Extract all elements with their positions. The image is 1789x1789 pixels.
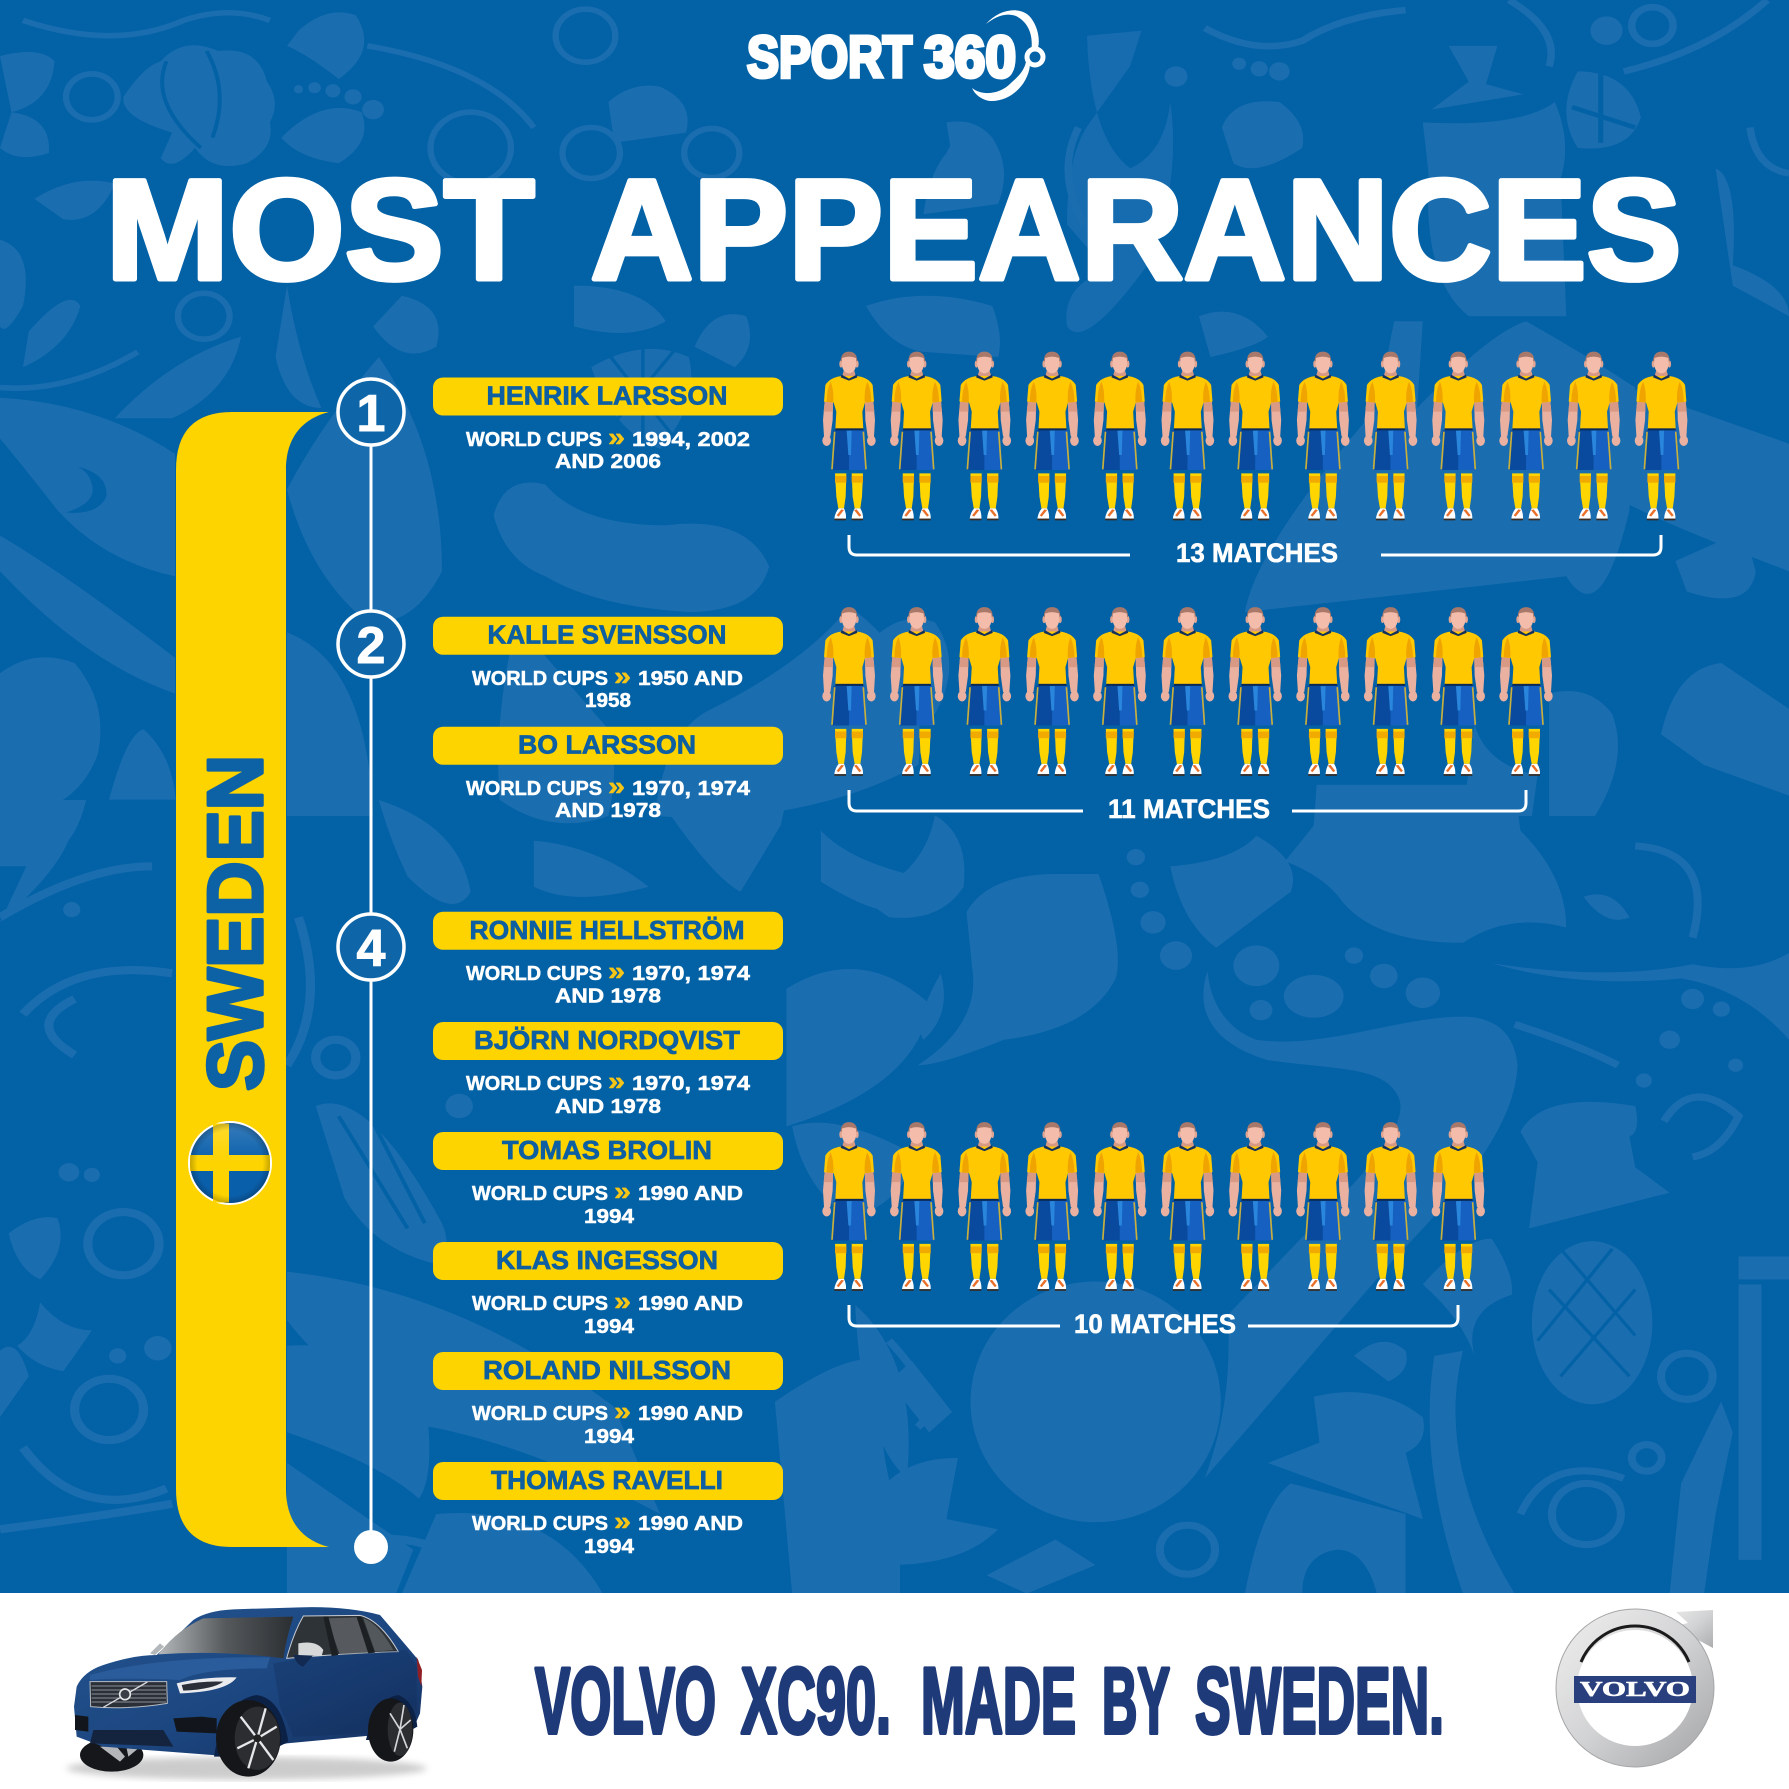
bracket: 11 matches	[849, 790, 1526, 824]
player: Kalle Svensson: KALLE SVENSSON	[488, 620, 726, 650]
bracket: 11 matches: 11 MATCHES	[1108, 794, 1270, 824]
player: Bo Larsson: AND 1978	[555, 800, 661, 822]
player: Thomas Ravelli: 1990 AND	[638, 1513, 743, 1535]
player: Ronnie Hellström: RONNIE HELLSTRÖM	[470, 915, 744, 945]
player: Björn Nordqvist: »	[608, 1066, 625, 1096]
player: Bo Larsson: WORLD CUPS	[466, 778, 602, 800]
player: Ronnie Hellström: WORLD CUPS	[466, 963, 602, 985]
tagline	[535, 1648, 1444, 1753]
logo: Sport360: SPORT	[747, 25, 912, 90]
player: Thomas Ravelli: »	[614, 1506, 631, 1536]
tagline: BY	[1102, 1648, 1170, 1753]
player: Roland Nilsson: ROLAND NILSSON	[483, 1355, 731, 1385]
player: Kalle Svensson	[433, 617, 783, 712]
timeline end dot	[354, 1530, 388, 1564]
pictogram row: 13 matches	[822, 352, 1688, 520]
player: Kalle Svensson: 1958	[585, 690, 631, 712]
player: Bo Larsson	[433, 727, 783, 822]
panel: Sweden yellow banner	[176, 412, 329, 1547]
player: Henrik Larsson	[433, 378, 783, 473]
player: Ronnie Hellström: »	[608, 956, 625, 986]
player: Klas Ingesson: 1990 AND	[638, 1293, 743, 1315]
bracket: 13 matches	[849, 535, 1661, 568]
player: Thomas Ravelli: THOMAS RAVELLI	[491, 1465, 723, 1495]
player: Thomas Ravelli	[433, 1462, 783, 1558]
player: Tomas Brolin	[433, 1132, 783, 1228]
player: Tomas Brolin: WORLD CUPS	[472, 1183, 608, 1205]
logo: Volvo emblem	[1556, 1609, 1714, 1767]
bracket: 10 matches	[849, 1305, 1458, 1339]
logo: Sport360: 360	[924, 25, 1016, 90]
tagline: MADE	[921, 1648, 1076, 1753]
player: Klas Ingesson: 1994	[584, 1316, 635, 1338]
player: Tomas Brolin: TOMAS BROLIN	[502, 1135, 712, 1165]
player: Kalle Svensson: WORLD CUPS	[472, 668, 608, 690]
rank 2 marker: 2	[357, 617, 385, 675]
rank 4 marker	[338, 914, 404, 980]
player: Klas Ingesson: WORLD CUPS	[472, 1293, 608, 1315]
bracket: 10 matches: 10 MATCHES	[1074, 1309, 1236, 1339]
player: Björn Nordqvist	[433, 1022, 783, 1118]
rank 4 marker: 4	[357, 920, 386, 978]
player: Henrik Larsson: 1994, 2002	[632, 429, 750, 451]
player: Björn Nordqvist: WORLD CUPS	[466, 1073, 602, 1095]
rank 1 marker	[338, 379, 404, 445]
title: MOST	[106, 151, 534, 310]
rank 1 marker: 1	[357, 385, 385, 443]
pictogram row: 10 matches	[822, 1122, 1485, 1291]
car: Volvo XC90	[67, 1607, 427, 1780]
player: Roland Nilsson: »	[614, 1396, 631, 1426]
player: Ronnie Hellström: 1970, 1974	[632, 963, 751, 985]
player: Bo Larsson: »	[608, 771, 625, 801]
player: Roland Nilsson: 1994	[584, 1426, 635, 1448]
player: Roland Nilsson: 1990 AND	[638, 1403, 743, 1425]
player: Tomas Brolin: 1990 AND	[638, 1183, 743, 1205]
country name: SWEDEN	[191, 755, 279, 1091]
player: Roland Nilsson: WORLD CUPS	[472, 1403, 608, 1425]
player: Kalle Svensson: »	[614, 661, 631, 691]
player: Klas Ingesson: »	[614, 1286, 631, 1316]
player: Klas Ingesson: KLAS INGESSON	[496, 1245, 718, 1275]
player: Bo Larsson: BO LARSSON	[518, 730, 696, 760]
bracket: 13 matches: 13 MATCHES	[1176, 538, 1338, 568]
player: Tomas Brolin: 1994	[584, 1206, 635, 1228]
emblem wordmark: VOLVO	[1580, 1677, 1690, 1701]
player: Roland Nilsson	[433, 1352, 783, 1448]
player: Henrik Larsson: WORLD CUPS	[466, 429, 602, 451]
sponsor footer	[0, 1593, 1789, 1789]
player: Thomas Ravelli: WORLD CUPS	[472, 1513, 608, 1535]
player: Tomas Brolin: »	[614, 1176, 631, 1206]
player: Thomas Ravelli: 1994	[584, 1536, 635, 1558]
player: Henrik Larsson: AND 2006	[555, 451, 661, 473]
player: Henrik Larsson: »	[608, 422, 625, 452]
tagline: VOLVO	[535, 1648, 716, 1753]
icon: Swedish flag	[189, 1122, 271, 1204]
tagline: SWEDEN.	[1195, 1648, 1444, 1753]
tagline: XC90.	[741, 1648, 891, 1753]
logo: Sport360	[747, 10, 1043, 101]
timeline	[338, 379, 404, 1564]
player: Björn Nordqvist: 1970, 1974	[632, 1073, 751, 1095]
player: Ronnie Hellström	[433, 912, 783, 1008]
player: Björn Nordqvist: BJÖRN NORDQVIST	[474, 1025, 740, 1055]
rank 2 marker	[338, 611, 404, 677]
player: Björn Nordqvist: AND 1978	[555, 1096, 661, 1118]
pictogram row: 11 matches	[822, 607, 1553, 776]
player: Henrik Larsson: HENRIK LARSSON	[486, 380, 728, 410]
title	[106, 151, 1682, 310]
title: APPEARANCES	[590, 151, 1682, 310]
player: Klas Ingesson	[433, 1242, 783, 1338]
player: Kalle Svensson: 1950 AND	[638, 668, 743, 690]
player: Ronnie Hellström: AND 1978	[555, 986, 661, 1008]
player: Bo Larsson: 1970, 1974	[632, 778, 751, 800]
